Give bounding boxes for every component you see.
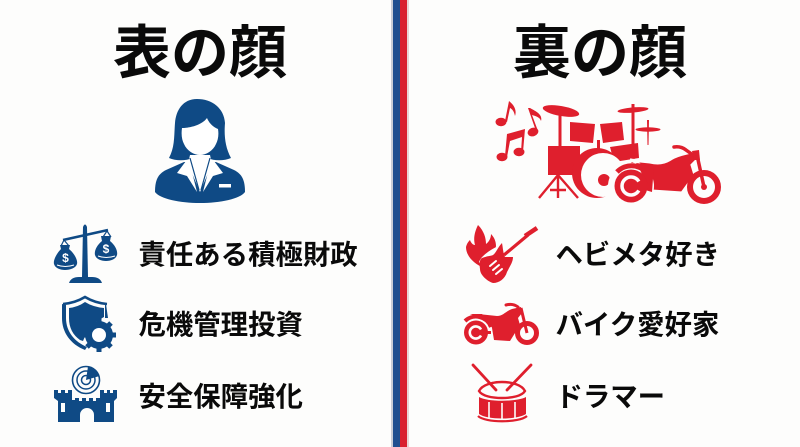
label: heavy metal fan: ヘビメタ好き — [556, 239, 720, 270]
heading: hidden face: 裏の顔 — [513, 21, 687, 86]
music notes — [496, 101, 541, 161]
cymbals and stands — [542, 103, 580, 119]
icon: motorcycle — [462, 304, 536, 346]
icon: flaming guitar — [466, 225, 537, 283]
icon: businesswoman — [155, 99, 245, 203]
icon: balance scale with money bags — [54, 224, 117, 283]
motorcycle — [608, 147, 718, 209]
label: security strengthening: 安全保障強化 — [138, 381, 303, 412]
center divider — [391, 0, 409, 447]
label: crisis management investment: 危機管理投資 — [138, 309, 303, 340]
icon: shield with gear — [62, 297, 116, 352]
icon: snare drum with sticks — [473, 365, 531, 421]
icon: drums, music notes and motorcycle — [496, 101, 718, 209]
label: responsible fiscal policy: 責任ある積極財政 — [138, 239, 358, 270]
icon: balance scale with money bags: $ — [103, 242, 110, 256]
bass drum — [572, 148, 622, 198]
heading: front face: 表の顔 — [113, 21, 287, 86]
floor tom and stand — [548, 146, 580, 175]
label: drummer: ドラマー — [556, 381, 665, 412]
icon: balance scale with money bags: $ — [62, 251, 69, 265]
toms — [570, 122, 595, 143]
label: motorcycle enthusiast: バイク愛好家 — [556, 309, 719, 340]
icon: castle with radar — [54, 366, 117, 422]
